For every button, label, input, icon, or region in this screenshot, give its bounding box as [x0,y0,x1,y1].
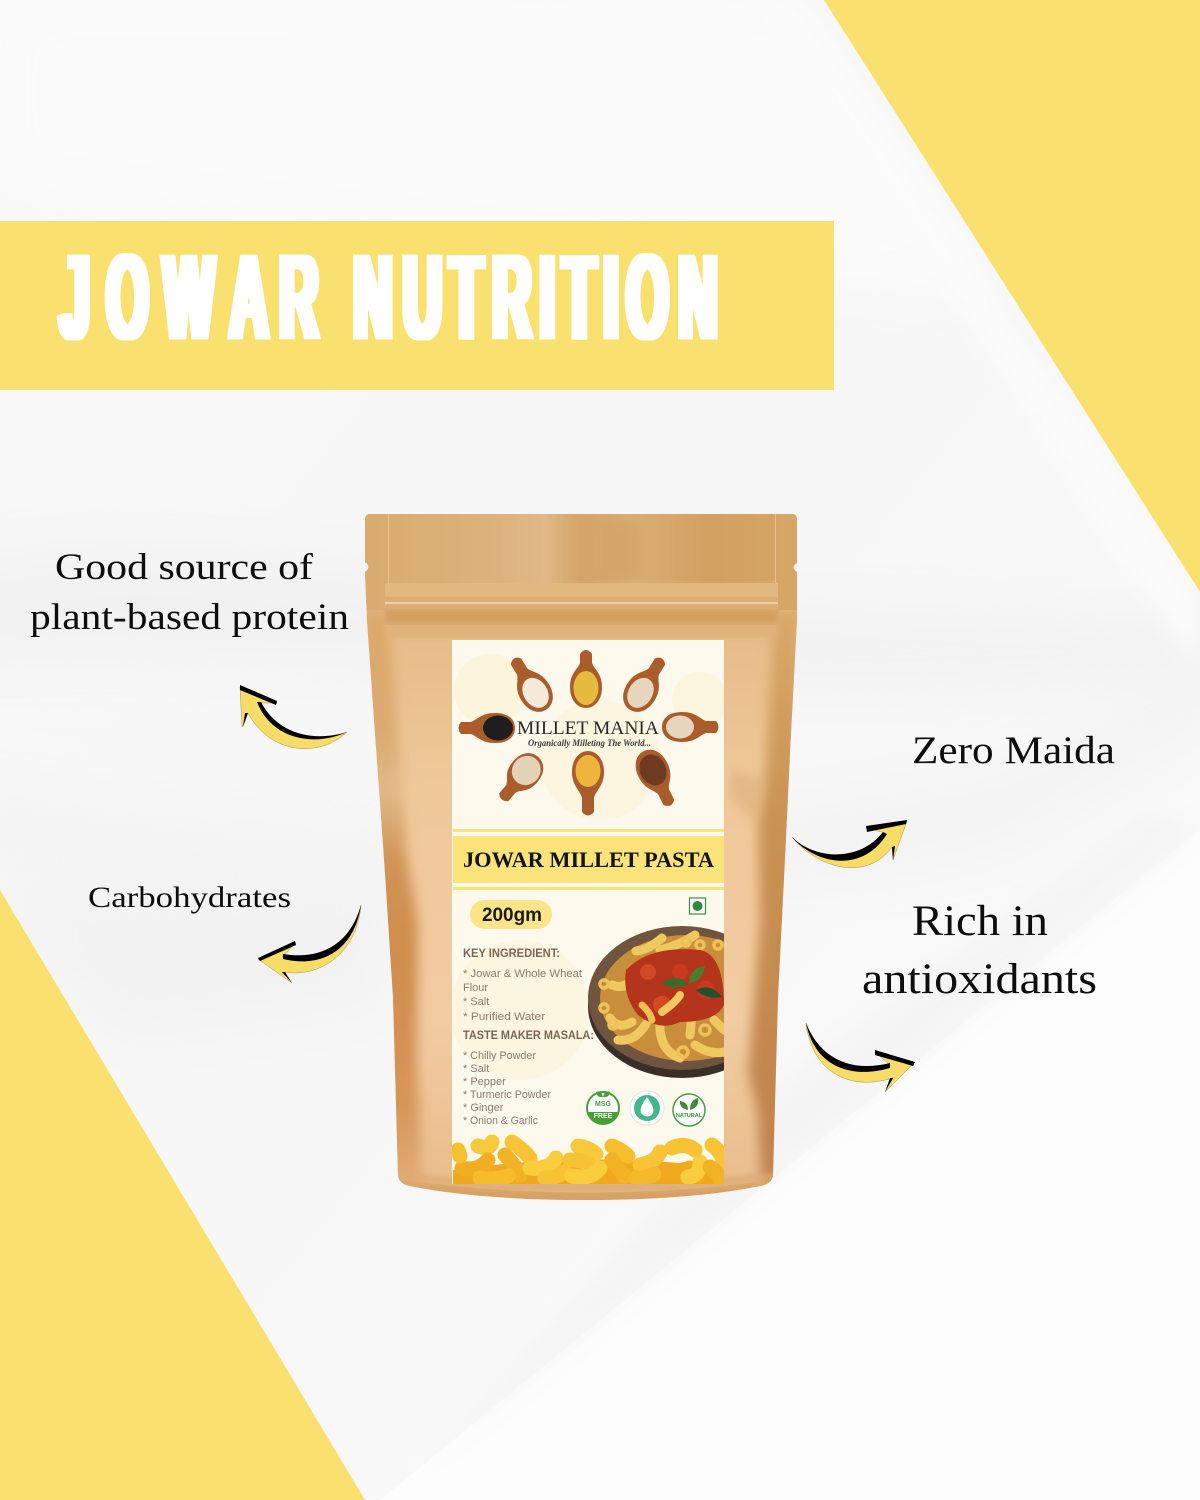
spoon: top middle [570,650,602,708]
arrow: to carbohydrates label [258,905,361,983]
product name band: JOWAR MILLET PASTA [463,847,714,872]
pouch body [360,510,800,1205]
badge: natural [673,1094,705,1126]
pouch label [452,640,724,1184]
badge: MSG free: FREE [594,1113,613,1120]
title banner [0,221,834,390]
spoon: left [458,713,515,743]
spoon: top left [510,658,553,712]
badge: MSG free: MSG [595,1101,612,1108]
taste maker heading: TASTE MAKER MASALA: [463,1028,594,1042]
label: rich in antioxidants [862,898,1097,1003]
spoon: bottom right [636,750,674,806]
badge: water drop [630,1091,664,1125]
product pouch [360,510,800,1205]
key ingredient list: * Jowar & Whole Wheat [463,968,582,980]
product name band [453,829,724,890]
weight pill [470,900,552,929]
weight pill: 200gm [482,905,542,926]
yellow corner: bottom left [0,890,365,1500]
label: rich in antioxidants: antioxidants [862,956,1097,1003]
arrow: to zero maida label [792,820,907,868]
spoon: bottom middle [572,751,604,816]
label: carbohydrates: Carbohydrates [88,881,291,914]
label: good source of plant-based protein: plant-based protein [30,597,349,638]
arrow: to protein label [240,685,347,749]
label: good source of plant-based protein [30,547,349,638]
key ingredient list [463,968,582,1023]
badge: MSG free [587,1092,619,1124]
key ingredient list: * Salt [463,996,489,1008]
yellow corner: top right [824,0,1200,592]
arrow: to antioxidants label [806,1023,915,1092]
taste maker list: * Onion & Garlic [463,1115,538,1127]
taste maker list: * Turmeric Powder [463,1089,551,1101]
key ingredient heading: KEY INGREDIENT: [463,946,560,960]
key ingredient list: * Purified Water [463,1011,545,1023]
pasta pile [453,1142,724,1184]
taste maker list [463,1050,551,1127]
badge: natural: NATURAL [676,1113,703,1119]
brand tagline: Organically Milleting The World... [528,738,651,748]
label: zero maida: Zero Maida [912,729,1115,772]
brand name: MILLET MANIA [517,718,659,739]
taste maker list: * Pepper [463,1076,506,1088]
label: rich in antioxidants: Rich in [912,898,1048,945]
veg mark [690,898,706,914]
spoon: top right [623,658,666,712]
taste maker list: * Ginger [463,1102,504,1114]
key ingredient list: Flour [463,982,488,994]
spoon: bottom left [499,753,544,802]
title: JOWAR NUTRITION [60,229,717,365]
pasta bowl [588,926,724,1078]
spoon: right [662,712,718,742]
taste maker list: * Salt [463,1063,489,1075]
zipper strip [385,514,778,625]
label: good source of plant-based protein: Good source of [55,547,314,588]
taste maker list: * Chilly Powder [463,1050,536,1062]
